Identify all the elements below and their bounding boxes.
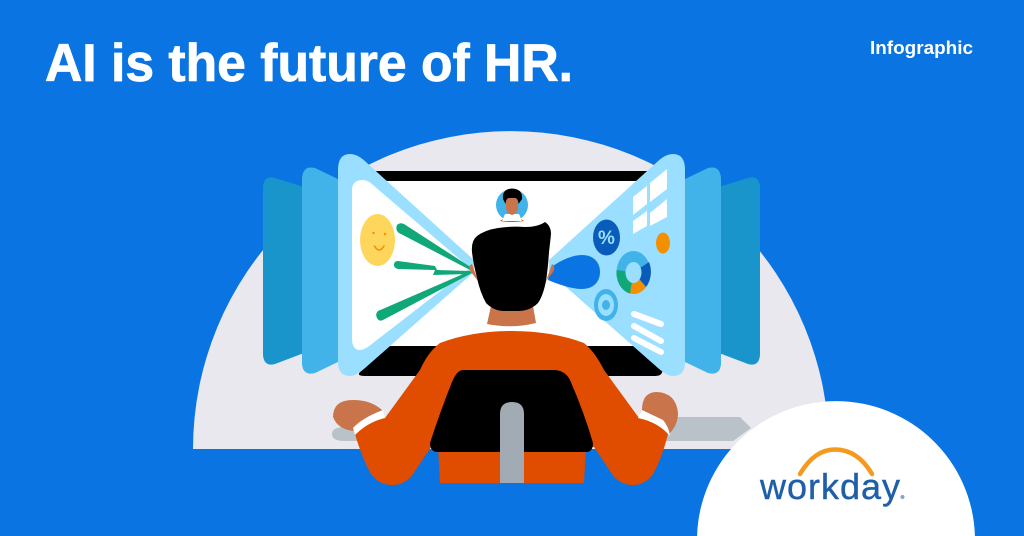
left screen panels <box>263 154 474 376</box>
icon: orange dot <box>656 232 670 254</box>
registered mark <box>900 495 904 499</box>
chair <box>430 370 593 483</box>
monitor <box>359 171 662 376</box>
title: AI is the future of HR. <box>45 34 573 93</box>
chair back <box>430 370 593 452</box>
icon: percent badge <box>593 220 620 256</box>
right cuff <box>638 410 670 436</box>
icon: donut chart <box>616 251 651 294</box>
logo arc <box>800 450 872 474</box>
orange sweater <box>355 331 668 485</box>
icon: green speech beams <box>376 223 472 321</box>
icon: percent badge: % <box>598 228 615 249</box>
panel: white inner left <box>352 180 470 350</box>
chair post <box>500 402 524 483</box>
label: Infographic: Infographic <box>870 38 973 58</box>
icon: target <box>594 289 618 321</box>
panel: middle left <box>302 167 340 374</box>
background semicircle <box>193 131 829 449</box>
logo wordmark: workday <box>759 466 900 507</box>
panel: front right <box>549 154 685 376</box>
icon: blue speech cone <box>548 255 600 289</box>
hair <box>472 222 551 311</box>
left hand <box>333 400 383 431</box>
icon: person avatar <box>496 188 528 222</box>
icon: window grid <box>633 169 667 234</box>
panel: back left <box>263 177 304 365</box>
right screen panels <box>548 154 760 376</box>
panel: back right <box>719 177 760 365</box>
right hand <box>640 392 678 434</box>
icon: smiley face <box>360 214 395 266</box>
icon: text lines <box>634 314 661 352</box>
panel: front left <box>338 154 474 376</box>
workday logo <box>759 450 904 507</box>
keyboard <box>332 417 751 441</box>
ears <box>469 264 478 281</box>
white logo circle <box>697 401 975 536</box>
left cuff <box>353 410 385 435</box>
neck <box>487 306 536 326</box>
person from behind <box>333 222 678 485</box>
panel: middle right <box>683 167 721 374</box>
